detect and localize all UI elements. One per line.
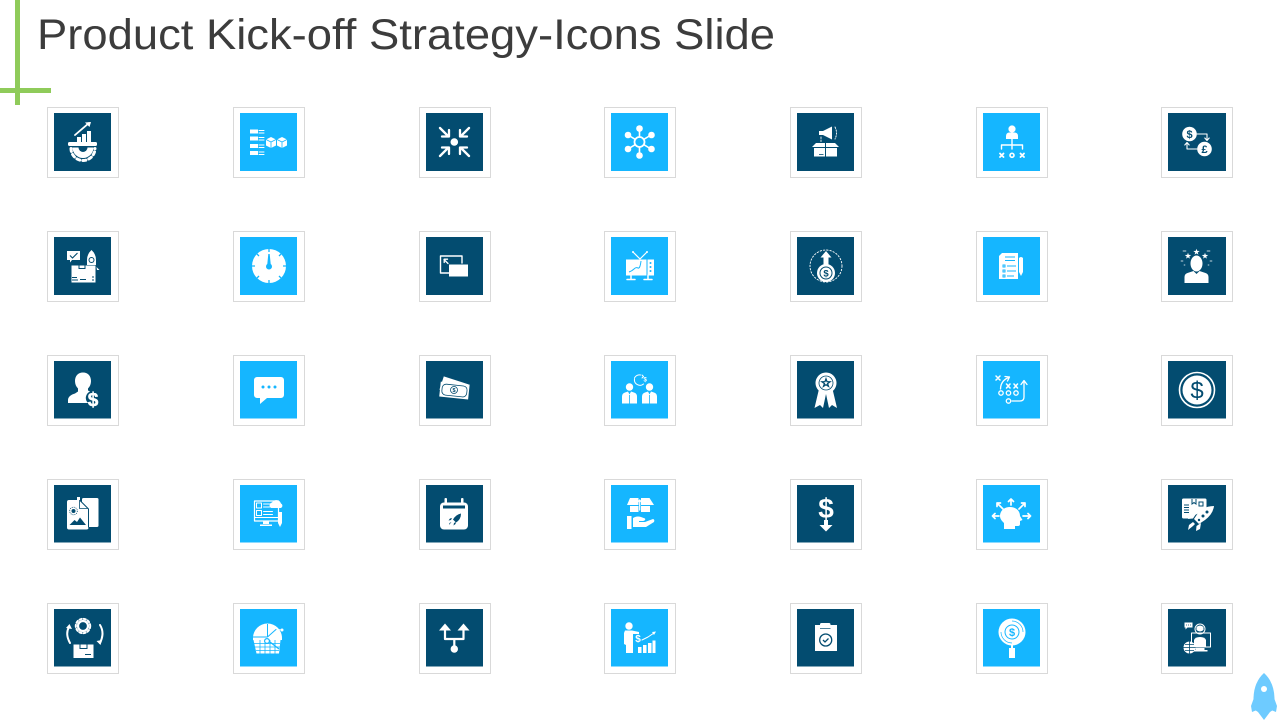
icon: stack of banknotes: $ <box>452 388 456 394</box>
panel: tile team hierarchy <box>976 108 1048 178</box>
icon: chart rising on a gear <box>68 122 97 160</box>
icon: person with three stars <box>1181 249 1212 283</box>
icon: overlapping windows with arrow <box>440 256 468 276</box>
panel: tile network hub <box>604 108 676 178</box>
icon: tactics playbook <box>996 376 1027 403</box>
panel: tile team cycle <box>604 356 676 426</box>
panel: tile chat <box>234 356 304 426</box>
icon: forked arrows <box>439 624 470 653</box>
icon: dollar coin: $ <box>1190 378 1204 404</box>
panel: tile award ribbon <box>790 356 862 426</box>
icon: dollar to pound exchange <box>1182 127 1212 156</box>
panel: tile investor <box>48 356 118 426</box>
decorative green corner cross <box>0 0 51 105</box>
icon: four arrows to a center point <box>440 128 469 156</box>
panel: tile sales presenter <box>604 604 676 674</box>
icon: coin with upward arrow: $ <box>823 268 829 280</box>
panel: tile speed dial <box>234 232 304 302</box>
icon: dollar to pound exchange: $ <box>1186 129 1193 141</box>
icon: megaphone over open box <box>812 126 839 156</box>
icon: person with dollar sign: $ <box>88 390 99 411</box>
panel: tile resize window <box>420 232 490 302</box>
panel: tile growth gear <box>48 108 118 178</box>
icon: table with two boxes <box>250 130 287 155</box>
panel: tile converging arrows <box>420 108 490 178</box>
icon: person leading an org tree <box>1000 125 1024 157</box>
icon: open box over hand <box>627 498 654 529</box>
icon: gear, cycle arrows and box <box>66 619 102 658</box>
icon: magnifier with dollar: $ <box>1009 627 1015 639</box>
panel: tile table and boxes <box>234 108 304 178</box>
icon: two people exchanging money: $ <box>644 378 648 384</box>
icon: checklist paper and pen <box>999 253 1023 279</box>
icon: clipboard with check <box>815 623 837 651</box>
icon: calendar with rocket <box>440 498 468 530</box>
panel: tile financial search <box>976 604 1048 674</box>
icon: dollar with down arrow: $ <box>818 493 834 524</box>
panel: tile approved clipboard <box>790 604 862 674</box>
panel: tile revenue growth <box>790 232 862 302</box>
panel: tile ideas head <box>976 480 1048 550</box>
panel: tile game plan <box>976 356 1048 426</box>
icon: agent at monitor with globe <box>1184 622 1210 654</box>
panel: tile launch box <box>48 232 118 302</box>
panel: tile documents <box>976 232 1048 302</box>
panel: tile product launch rocket <box>1162 480 1232 550</box>
icon: pie chart over globe grid <box>253 624 284 654</box>
panel: tile image files <box>48 480 118 550</box>
icon: rosette award <box>814 372 837 408</box>
title: Product Kick-off Strategy-Icons Slide <box>37 11 775 59</box>
icon: stopwatch dial <box>252 249 286 283</box>
panel: tile banknotes <box>420 356 490 426</box>
panel: tile product announcement <box>790 108 862 178</box>
icon: television with chart <box>626 251 654 280</box>
panel: tile dollar decrease <box>790 480 862 550</box>
panel: tile market analysis <box>234 604 304 674</box>
icon: image documents <box>67 497 98 530</box>
panel: tile product in hand <box>604 480 676 550</box>
panel: tile star talent <box>1162 232 1232 302</box>
panel: tile production cycle <box>48 604 118 674</box>
panel: tile online support <box>1162 604 1232 674</box>
panel: tile launch calendar <box>420 480 490 550</box>
panel: tile cloud software <box>234 480 304 550</box>
icon: hub and spoke network <box>625 125 655 159</box>
icon: rocket logo <box>1251 673 1277 720</box>
panel: tile split paths <box>420 604 490 674</box>
panel: tile dollar coin <box>1162 356 1232 426</box>
icon: box and rocket <box>1182 498 1214 531</box>
panel: tile television <box>604 232 676 302</box>
icon: chat, rocket and product box <box>67 250 100 282</box>
icon: monitor, cloud and pencil <box>254 500 282 527</box>
icon: dollar to pound exchange: £ <box>1201 144 1208 156</box>
icon: speech bubble <box>254 377 284 404</box>
panel: tile currency exchange <box>1162 108 1232 178</box>
icon: head with radiating arrows <box>992 499 1030 529</box>
icon: presenter with growth chart: $ <box>635 634 641 645</box>
